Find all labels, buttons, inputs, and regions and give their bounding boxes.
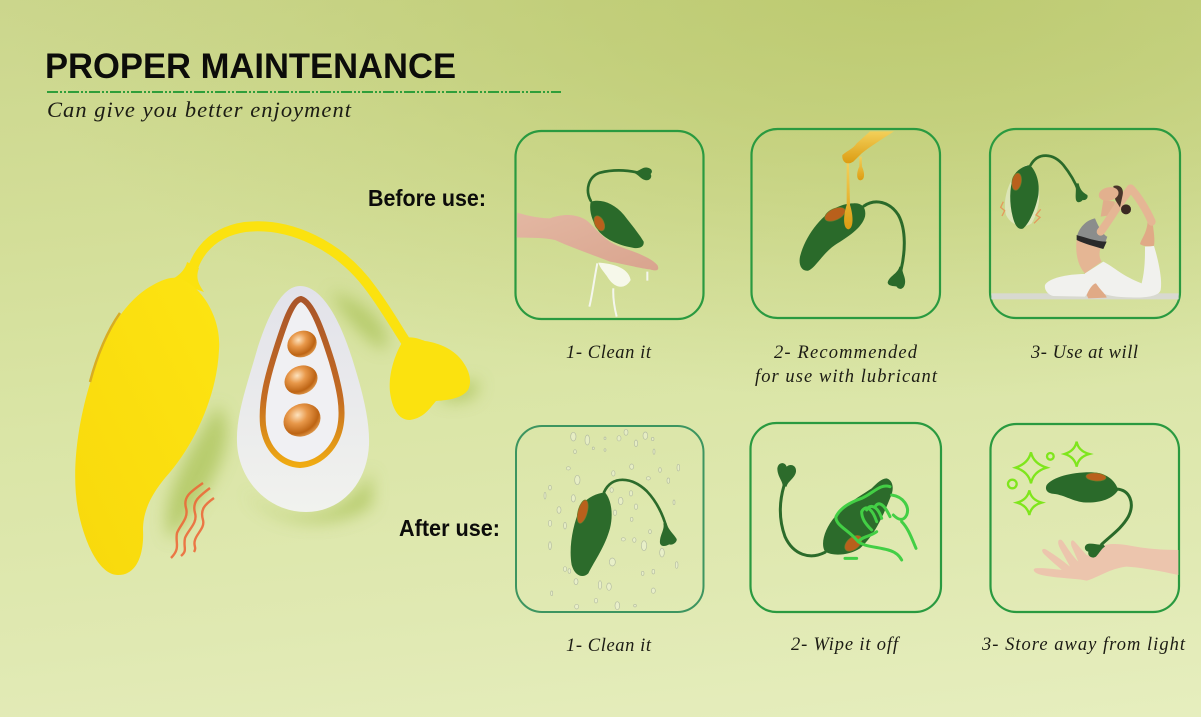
black band [1077, 235, 1107, 249]
panel: before 2 lubricant [752, 129, 940, 318]
yoga and device illustration [991, 156, 1179, 299]
vibration marks [1001, 202, 1041, 223]
arms [1101, 188, 1152, 232]
title: PROPER MAINTENANCE [45, 47, 456, 86]
caption: before 1: 1- Clean it [566, 343, 652, 363]
copper button [592, 214, 607, 233]
green tail [864, 202, 904, 270]
green body [800, 203, 865, 271]
subtitle: Can give you better enjoyment [47, 97, 352, 122]
panel frame [516, 426, 704, 612]
panel: after 3 store away [990, 424, 1179, 612]
cord base [170, 262, 204, 292]
heading: before use: Before use: [368, 185, 486, 211]
caption: before 3: 3- Use at will [1030, 343, 1138, 363]
green tail [604, 480, 667, 528]
device and wiping hand [777, 463, 916, 560]
button plus [283, 326, 321, 362]
torso [1076, 240, 1102, 273]
green tail [1031, 156, 1078, 191]
hand, device and sparkles [1008, 442, 1178, 581]
copper button [1011, 172, 1023, 191]
green tail [1102, 489, 1131, 544]
green tail [780, 486, 825, 556]
panel frame [990, 424, 1179, 612]
green body [590, 201, 644, 248]
product photo: yellow device and remote [75, 226, 479, 575]
green heart [1075, 183, 1088, 202]
title underline [47, 91, 561, 93]
water splash [589, 263, 647, 317]
oil and device illustration [800, 131, 905, 289]
oil dropper [842, 131, 894, 163]
copper button [842, 532, 865, 554]
lime hand outline [836, 486, 916, 560]
green heart [635, 168, 652, 180]
green body [1010, 165, 1039, 229]
yoga woman [1045, 185, 1161, 298]
panel: before 1 clean it [516, 131, 704, 319]
open hand [1034, 540, 1178, 581]
raised foot [1140, 222, 1154, 246]
panel frame [516, 131, 704, 319]
hair bun [1121, 204, 1131, 214]
caption: before 2: 2- Recommended [774, 343, 918, 363]
green tail [588, 170, 638, 201]
hand and device illustration [517, 168, 658, 317]
caption: after 3: 3- Store away from light [981, 635, 1186, 655]
yellow tail cord [190, 226, 408, 345]
product shadows [166, 292, 479, 540]
copper button [575, 499, 590, 524]
green body [823, 478, 893, 555]
heading: after use: After use: [399, 515, 500, 541]
panel: after 2 wipe it off [750, 423, 941, 612]
sparkles [1008, 442, 1089, 515]
grey top [1077, 218, 1107, 243]
panel: after 1 clean it [516, 426, 704, 612]
gold edge strip [90, 313, 120, 382]
green body [571, 492, 612, 576]
oil stream and drops [844, 157, 864, 229]
green heart [777, 463, 796, 487]
gold teardrop ring [263, 299, 342, 465]
green body [1046, 472, 1118, 503]
water droplets and device [544, 429, 680, 610]
panel: before 3 use at will [990, 129, 1180, 318]
caption: before 2: for use with lubricant [755, 367, 938, 387]
caption: after 1: 1- Clean it [566, 636, 652, 656]
caption: after 2: 2- Wipe it off [791, 635, 901, 655]
green heart [1085, 544, 1105, 558]
green heart [660, 523, 677, 546]
hair [1113, 186, 1123, 207]
panel frame [750, 423, 941, 612]
button minus [278, 397, 326, 443]
remote control egg [237, 286, 369, 512]
droplets [544, 429, 680, 610]
raised leg [1085, 246, 1161, 298]
yellow heart end [390, 337, 470, 420]
wet hand [517, 213, 658, 270]
panel frame [990, 129, 1180, 318]
button power [280, 360, 322, 400]
yoga mat [991, 293, 1179, 299]
copper button [1086, 472, 1106, 482]
device vibration halo [1005, 165, 1039, 226]
face [1097, 185, 1120, 203]
green heart [888, 267, 905, 289]
heat waves [171, 483, 214, 558]
neck [1101, 200, 1115, 217]
copper button [823, 205, 847, 224]
panel frame [752, 129, 940, 318]
front leg [1045, 274, 1095, 297]
lower foot [1087, 283, 1107, 298]
yellow main body [75, 278, 219, 575]
